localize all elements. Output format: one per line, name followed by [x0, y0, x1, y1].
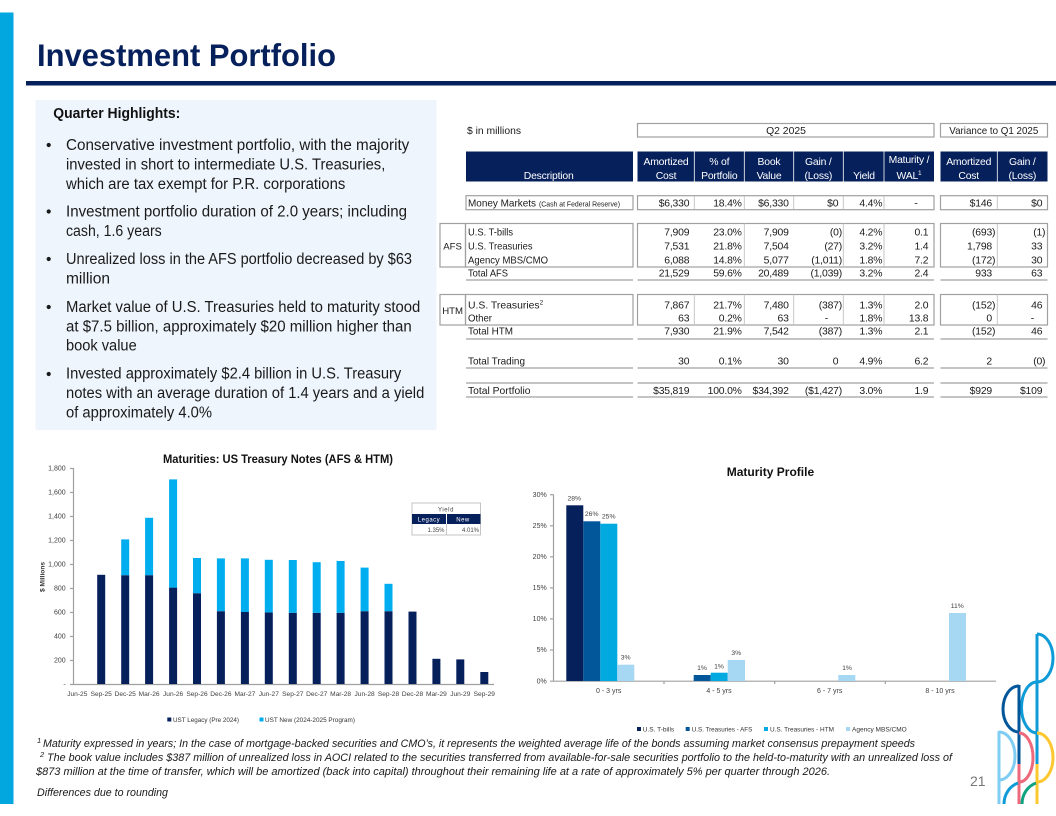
y axis: 20%	[533, 554, 547, 561]
row: total HTM: (387)	[819, 327, 842, 338]
yield table: Legacy	[418, 518, 440, 524]
bullet: market value: book value	[66, 338, 137, 355]
block: AFS securities: 21.8%	[713, 242, 742, 253]
yield table: 1.35%	[427, 528, 445, 534]
block: AFS securities: 5,077	[764, 256, 789, 267]
y axis: 800	[54, 586, 66, 592]
x axis: Jun-26	[163, 691, 184, 698]
bullet: conservative portfolio: Conservative investment portfolio, with the majority	[66, 137, 410, 154]
row: total AFS: 63	[1031, 269, 1043, 280]
block: HTM securities: 1.3%	[859, 301, 882, 312]
bars: 6-7 yrs: 1%	[842, 665, 852, 672]
bullet: conservative portfolio: invested in short to intermediate U.S. Treasuries,	[66, 156, 385, 174]
table header: Portfolio	[701, 171, 738, 182]
block: AFS securities: (1,011)	[811, 256, 842, 267]
heading: quarter highlights: Quarter Highlights:	[53, 106, 180, 122]
bullet: duration: Investment portfolio duration of 2.0 years; including	[66, 204, 407, 221]
block: AFS securities: 0.1	[914, 228, 929, 239]
y axis: 1,800	[48, 466, 66, 472]
y axis: 10%	[533, 616, 547, 623]
x axis: Sep-27	[282, 691, 304, 698]
row: total HTM: 46	[1031, 327, 1043, 338]
bullet: market value: at $7.5 billion, approximately $20 million higher than	[66, 318, 412, 335]
y axis: 0%	[537, 678, 547, 685]
x axis: 4 - 5 yrs	[706, 688, 732, 695]
y axis: 400	[54, 634, 66, 640]
table header: (Loss)	[804, 171, 832, 182]
legend	[637, 726, 907, 734]
footnote 2: 2	[39, 750, 45, 759]
bullet: conservative portfolio	[47, 137, 410, 193]
row: money markets: $6,330	[758, 199, 789, 210]
legend	[167, 717, 355, 724]
block: AFS securities	[440, 224, 1048, 267]
x axis: Mar-27	[234, 691, 256, 698]
block: AFS securities: (0)	[830, 228, 842, 239]
block: AFS securities: 4.2%	[859, 228, 882, 239]
row: total AFS: 2.4	[914, 269, 929, 280]
chart: maturity profile	[533, 465, 996, 734]
table header: Gain /	[805, 157, 832, 168]
bars: 4-5 yrs	[694, 650, 745, 681]
block: AFS securities: AFS	[443, 242, 462, 253]
row: total AFS: 21,529	[659, 269, 690, 280]
row: money markets: $0	[827, 199, 839, 210]
bars: 4-5 yrs: 1%	[697, 665, 707, 672]
y axis: 1,200	[48, 538, 66, 544]
block: AFS securities: 7.2	[914, 256, 929, 267]
bars: 0-3 yrs: 28%	[567, 496, 581, 502]
row: total HTM: 21.9%	[713, 327, 742, 338]
x axis: Sep-29	[474, 691, 495, 698]
table header: (Loss)	[1008, 171, 1036, 182]
x axis: Sep-26	[186, 691, 208, 698]
block: HTM securities: 2	[540, 300, 544, 307]
block: HTM securities: 63	[778, 314, 789, 325]
row: total trading: 2	[986, 357, 992, 368]
table header	[466, 152, 1048, 182]
block: HTM securities: 46	[1031, 301, 1043, 312]
row: total HTM: 1.3%	[859, 327, 882, 338]
block: AFS securities: U.S. Treasuries	[468, 242, 532, 253]
block: AFS securities: 7,909	[764, 228, 789, 239]
block: AFS securities: 1,798	[967, 242, 992, 253]
row: money markets: (Cash at Federal Reserve)	[539, 200, 620, 209]
series: UST legacy	[97, 575, 488, 684]
x axis: 0 - 3 yrs	[596, 688, 622, 695]
table header: 1	[918, 170, 922, 177]
table header: WAL	[897, 171, 918, 182]
row: total trading: Total Trading	[468, 357, 525, 368]
bars: 4-5 yrs: 3%	[731, 650, 741, 657]
chart: treasury note maturities	[40, 452, 495, 724]
block: HTM securities: (152)	[972, 301, 995, 312]
x axis: Dec-26	[210, 691, 232, 698]
row: total HTM: 7,542	[764, 327, 789, 338]
title: Investment Portfolio	[37, 37, 336, 73]
bars: 6-7 yrs	[838, 665, 855, 681]
x axis: Mar-28	[330, 691, 351, 698]
block: AFS securities: 33	[1031, 242, 1043, 253]
row: total HTM: 2.1	[914, 327, 929, 338]
block: HTM securities: 0.2%	[719, 314, 742, 325]
yield table: Yield	[438, 508, 454, 514]
legend: U.S. T-bills	[643, 726, 675, 734]
row: money markets: Money Markets	[468, 199, 536, 210]
x axis: 8 - 10 yrs	[925, 688, 955, 695]
row: total HTM: (152)	[972, 327, 995, 338]
block: HTM securities: Other	[468, 314, 492, 325]
x axis	[550, 681, 996, 695]
block: HTM securities	[440, 294, 1048, 325]
x axis: Jun-29	[450, 691, 471, 698]
block: HTM securities: U.S. Treasuries	[468, 301, 540, 312]
row: total portfolio: 100.0%	[708, 386, 742, 397]
x axis: Dec-27	[306, 691, 328, 698]
table header: Book	[758, 157, 781, 168]
row: total AFS: 20,489	[758, 269, 789, 280]
row: total trading: 0	[833, 357, 839, 368]
row: total AFS: 933	[975, 269, 992, 280]
row: total portfolio: $109	[1020, 386, 1043, 397]
row: total AFS: (1,039)	[810, 269, 842, 280]
row: total portfolio: Total Portfolio	[468, 386, 531, 397]
bars: 0-3 yrs: 26%	[585, 511, 599, 518]
block: HTM securities: HTM	[442, 306, 463, 317]
chart title: Maturity Profile	[727, 465, 815, 479]
row: total portfolio: $929	[970, 386, 992, 397]
x axis: Dec-28	[402, 691, 423, 698]
bullet: conservative portfolio: which are tax exempt for P.R. corporations	[65, 176, 346, 193]
x axis: 6 - 7 yrs	[817, 688, 843, 695]
legend: UST New (2024-2025 Program)	[265, 717, 355, 724]
block: HTM securities: -	[1031, 314, 1034, 325]
y axis	[48, 466, 74, 688]
x axis: Mar-29	[426, 691, 447, 698]
block: HTM securities: 1.8%	[859, 314, 882, 325]
y axis: 5%	[537, 647, 547, 654]
bullet: unrealized loss: Unrealized loss in the AFS portfolio decreased by $63	[66, 251, 412, 268]
x axis: Dec-25	[115, 691, 136, 698]
legend: UST Legacy (Pre 2024)	[173, 717, 239, 724]
y axis: 25%	[533, 523, 547, 530]
bars: 0-3 yrs	[566, 496, 634, 681]
table header: Cost	[958, 171, 979, 182]
block: AFS securities: 14.8%	[713, 256, 742, 267]
block: AFS securities: (172)	[972, 256, 995, 267]
block: AFS securities: 30	[1031, 256, 1043, 267]
block: AFS securities: (1)	[1033, 228, 1045, 239]
legend: U.S. Treasuries - HTM	[770, 726, 834, 734]
x axis: Sep-25	[91, 691, 112, 698]
block: AFS securities: U.S. T-bills	[468, 228, 513, 239]
yield table: New	[456, 518, 470, 524]
block: HTM securities: -	[825, 314, 828, 325]
row: money markets	[466, 196, 1048, 210]
yield table	[412, 503, 480, 535]
row: money markets: -	[914, 199, 918, 210]
footnote 2: The book value includes $387 million of unrealized loss in AOCI related to the securities transferred from available-for-sale securities portfolio to the held-to-maturity with an unrealized loss of	[47, 752, 954, 764]
chart title: Maturities: US Treasury Notes (AFS & HTM)	[163, 452, 393, 466]
block: AFS securities: 1.8%	[859, 256, 882, 267]
row: total portfolio	[466, 383, 1048, 397]
row: total portfolio: ($1,427)	[805, 386, 842, 397]
block: AFS securities: 6,088	[664, 256, 690, 267]
yield table: 4.01%	[462, 528, 480, 534]
y axis: 1,000	[48, 562, 66, 568]
bullet: unrealized loss: million	[66, 270, 110, 287]
column group: Q2 2025: Q2 2025	[766, 126, 806, 137]
x axis: Jun-28	[355, 691, 375, 698]
row: total trading: (0)	[1033, 357, 1045, 368]
y axis: 1,600	[48, 490, 66, 496]
block: AFS securities: 23.0%	[713, 228, 742, 239]
y axis: 30%	[533, 492, 547, 499]
row: total HTM: Total HTM	[468, 327, 513, 338]
row: total portfolio: 3.0%	[859, 386, 882, 397]
table header: Maturity /	[889, 155, 930, 166]
block: AFS securities: 7,909	[664, 228, 690, 239]
row: total AFS: 59.6%	[713, 269, 742, 280]
x axis: Mar-26	[139, 691, 160, 698]
row: money markets: 4.4%	[859, 199, 882, 210]
bullet: invested: of approximately 4.0%	[66, 404, 212, 421]
block: AFS securities: (693)	[972, 228, 995, 239]
footnote 1: Maturity expressed in years; In the case of mortgage-backed securities and CMO’s, it represents the weighted average life of the bonds assuming market consensus prepayment speeds	[43, 738, 915, 750]
rounding note: Differences due to rounding	[37, 787, 169, 799]
x axis	[67, 684, 495, 698]
panel: quarter highlights	[36, 100, 436, 430]
block: HTM securities: 63	[678, 314, 690, 325]
block: AFS securities: (27)	[824, 242, 842, 253]
column group: variance: Variance to Q1 2025	[949, 126, 1039, 137]
block: HTM securities: 0	[986, 314, 992, 325]
row: total portfolio: 1.9	[914, 386, 929, 397]
units label: $ in millions	[467, 126, 521, 137]
table header: Amortized	[644, 157, 689, 168]
left accent bar	[0, 12, 14, 804]
bullet: invested: notes with an average duration of 1.4 years and a yield	[66, 385, 424, 402]
x axis: Jun-27	[259, 691, 279, 698]
bullet: market value	[47, 299, 420, 355]
bars: 8-10 yrs: 11%	[951, 603, 964, 610]
bars: 0-3 yrs: 25%	[602, 514, 616, 520]
row: total trading: 30	[778, 357, 789, 368]
title rule	[26, 81, 1056, 86]
footnotes	[35, 736, 954, 799]
block: AFS securities: 1.4	[914, 242, 929, 253]
x axis: Sep-28	[378, 691, 399, 698]
row: total trading: 4.9%	[859, 357, 882, 368]
bullet: invested	[47, 366, 424, 421]
row: total trading: 6.2	[914, 357, 929, 368]
row: total trading: 0.1%	[719, 357, 742, 368]
y axis: 600	[54, 610, 66, 616]
row: total HTM: 7,930	[664, 327, 690, 338]
legend: Agency MBS/CMO	[852, 726, 907, 734]
block: AFS securities: 7,531	[664, 242, 690, 253]
table header: Description	[524, 171, 574, 182]
row: total portfolio: $34,392	[753, 386, 789, 397]
bars: 4-5 yrs: 1%	[714, 663, 724, 670]
table header: Amortized	[946, 157, 992, 168]
portfolio table	[440, 124, 1048, 397]
row: total HTM	[466, 327, 1048, 339]
x axis: Jun-25	[67, 691, 88, 698]
table header: % of	[709, 157, 730, 168]
bullet: unrealized loss	[47, 251, 412, 287]
table header: Value	[757, 171, 782, 182]
block: HTM securities: 13.8	[909, 314, 929, 325]
row: total AFS: Total AFS	[468, 269, 508, 280]
row: total trading: 30	[678, 357, 690, 368]
bars: 0-3 yrs: 3%	[621, 654, 631, 662]
block: AFS securities: 7,504	[764, 242, 789, 253]
block: HTM securities: 7,867	[664, 301, 690, 312]
bars: 8-10 yrs	[949, 603, 966, 681]
y axis: -	[63, 682, 66, 688]
row: total AFS: 3.2%	[859, 269, 882, 280]
row: total AFS	[466, 269, 1048, 280]
block: HTM securities: 21.7%	[713, 301, 742, 312]
page number: 21	[970, 773, 986, 789]
block: AFS securities: Agency MBS/CMO	[468, 256, 548, 267]
bullet: duration: cash, 1.6 years	[66, 223, 162, 240]
y axis	[533, 492, 554, 685]
bullet: duration	[47, 204, 407, 240]
icon: decorative logo	[999, 634, 1053, 804]
legend: U.S. Treasuries - AFS	[692, 726, 753, 734]
row: total trading	[466, 357, 1048, 368]
block: HTM securities: (387)	[819, 301, 842, 312]
bullet: invested: Invested approximately $2.4 billion in U.S. Treasury	[66, 366, 402, 383]
block: HTM securities: 2.0	[914, 301, 929, 312]
column group: Q2 2025	[638, 124, 934, 137]
y axis: 15%	[533, 585, 547, 592]
block: AFS securities: 3.2%	[859, 242, 882, 253]
table header: Cost	[656, 171, 677, 182]
bullet: market value: Market value of U.S. Treasuries held to maturity stood	[66, 299, 420, 316]
row: money markets: $6,330	[659, 199, 690, 210]
block: HTM securities: 7,480	[764, 301, 789, 312]
row: money markets: $0	[1031, 199, 1043, 210]
y axis: 1,400	[48, 514, 66, 520]
footnote 1: 1	[37, 736, 41, 745]
table header: Gain /	[1009, 157, 1036, 168]
y axis: 200	[54, 658, 66, 664]
row: total portfolio: $35,819	[653, 386, 690, 397]
series: UST new	[121, 479, 392, 613]
footnote 2 continued: $873 million at the time of transfer, which will be amortized (back into capital) throughout their remaining life at a rate of approximately 5% per quarter through 2026.	[35, 766, 830, 778]
table header: Yield	[853, 171, 875, 182]
row: money markets: 18.4%	[713, 199, 742, 210]
row: money markets: $146	[970, 199, 992, 210]
y axis title: $ Millions	[40, 562, 46, 592]
